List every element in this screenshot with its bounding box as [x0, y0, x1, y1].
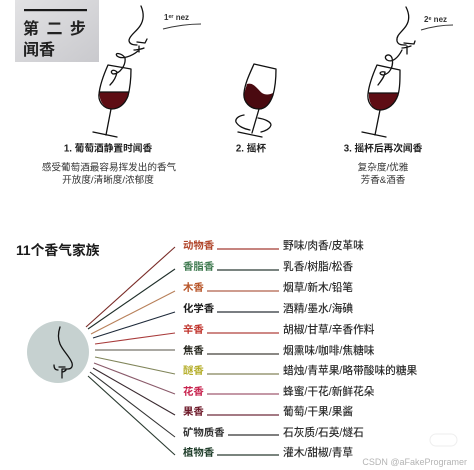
family: balsamic: 乳香/树脂/松香: [283, 260, 353, 273]
family: chemical: 酒精/墨水/海碘: [283, 302, 353, 315]
label: 1er nez: 1ᵉʳ nez: [164, 13, 189, 22]
family: fruit: [183, 405, 353, 418]
family: spice: [183, 323, 375, 336]
watermark: [362, 434, 467, 467]
title block: [15, 0, 99, 62]
title block: 闻香: [23, 41, 55, 59]
family: spice: 胡椒/甘草/辛香作料: [283, 323, 375, 336]
watermark: CSDN @aFakeProgramer: [362, 457, 467, 467]
family: animal: 动物香: [183, 239, 215, 252]
title block: 第 二 步: [23, 19, 87, 38]
family: wood: 烟草/新木/铅笔: [283, 281, 353, 294]
step 3 caption: 3. 摇杯后再次闻香: [344, 142, 423, 154]
family: spice: 辛香: [183, 323, 204, 336]
step 3 caption: 芳香&酒香: [361, 174, 406, 186]
step 2 caption: 2. 摇杯: [236, 142, 266, 154]
label: 2e nez: 2ᵉ nez: [424, 15, 447, 24]
family: fruit: 葡萄/干果/果酱: [283, 405, 353, 418]
family: mineral: [183, 426, 364, 439]
family: ether: 蜡烛/青苹果/略带酸味的糖果: [283, 364, 418, 377]
family: wood: [183, 281, 353, 294]
family: animal: [183, 239, 364, 252]
family: smoky: 烟熏味/咖啡/焦糖味: [283, 344, 375, 357]
family: animal: 野味/肉香/皮革味: [283, 239, 364, 252]
step 1 caption: 1. 葡萄酒静置时闻香: [64, 142, 152, 154]
illustration: first nose and glass: [93, 6, 147, 137]
step 1 caption: [42, 142, 177, 186]
family: floral: 花香: [183, 385, 204, 398]
family: wood: 木香: [183, 281, 204, 294]
family: vegetal: 植物香: [183, 446, 215, 459]
family: vegetal: 灌木/甜椒/青草: [283, 446, 353, 459]
family: balsamic: [183, 260, 353, 273]
family: floral: [183, 385, 375, 398]
label: 2e nez: [421, 15, 453, 30]
step 3 caption: [344, 142, 423, 186]
family: balsamic: 香脂香: [183, 260, 215, 273]
family: floral: 蜂蜜/干花/新鲜花朵: [283, 385, 375, 398]
step 3 caption: 复杂度/优雅: [358, 162, 409, 174]
radiating lines: [86, 247, 175, 455]
label: 1er nez: [163, 13, 201, 29]
family: chemical: 化学香: [183, 302, 215, 315]
illustration: swirling glass: [236, 64, 276, 137]
family: fruit: 果香: [183, 405, 204, 418]
family: mineral: 石灰质/石英/燧石: [283, 426, 364, 439]
family: smoky: [183, 344, 375, 357]
family: mineral: 矿物质香: [183, 426, 225, 439]
family: ether: [183, 364, 418, 377]
step 1 caption: 开放度/清晰度/浓郁度: [62, 174, 154, 186]
nose icon in circle: [27, 321, 89, 383]
illustration: second nose and glass: [362, 7, 415, 137]
step 1 caption: 感受葡萄酒最容易挥发出的香气: [42, 162, 177, 174]
family: vegetal: [183, 446, 353, 459]
family: chemical: [183, 302, 353, 315]
family: smoky: 焦香: [183, 344, 204, 357]
family: ether: 醚香: [183, 364, 204, 377]
heading: 11 aroma families: 11个香气家族: [16, 242, 100, 258]
